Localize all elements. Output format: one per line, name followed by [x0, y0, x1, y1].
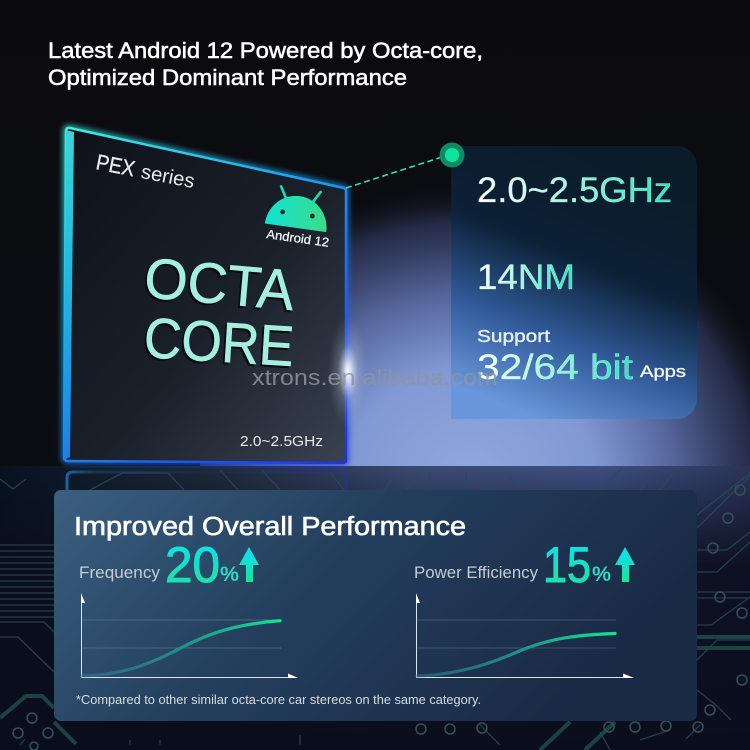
icon: up arrow — [615, 547, 635, 582]
chip edge glow — [64, 128, 346, 463]
chip left edge — [64, 130, 74, 460]
chip panel — [64, 128, 346, 463]
connector dot — [440, 142, 464, 168]
watermark: xtrons.en.alibaba.com — [252, 365, 498, 390]
metric: power efficiency: Power Efficiency — [414, 564, 539, 582]
metric: frequency — [79, 537, 259, 593]
support label: Support — [477, 326, 550, 346]
OCTA CORE heading — [140, 246, 297, 381]
light flare — [328, 316, 368, 428]
circuit board floor — [0, 466, 750, 750]
metric: frequency: Frequency — [79, 564, 161, 582]
OCTA CORE heading: CORE — [140, 308, 294, 381]
PEX series label: series — [139, 161, 196, 193]
apps label: Apps — [640, 362, 686, 381]
spec panel — [451, 146, 697, 419]
footnote: *Compared to other similar octa-core car stereos on the same category. — [76, 693, 481, 707]
metric: power efficiency: % — [592, 563, 611, 586]
title: Optimized Dominant Performance — [48, 65, 407, 90]
process spec: 14NM — [477, 258, 575, 297]
PEX series label: PEX — [94, 149, 137, 181]
metric: power efficiency — [414, 537, 635, 593]
Android 12 label: Android 12 — [266, 227, 330, 250]
metric: frequency: % — [220, 563, 239, 586]
title: Latest Android 12 Powered by Octa-core, — [48, 38, 483, 63]
OCTA CORE heading: OCTA — [142, 246, 297, 323]
metric: power efficiency: 15 — [543, 537, 591, 593]
chart: frequency curve — [81, 593, 298, 678]
OCTA CORE heading: CORE — [142, 306, 296, 379]
chip body — [64, 128, 346, 463]
title — [48, 38, 483, 90]
icon: up arrow — [239, 547, 259, 582]
connector line — [346, 142, 464, 188]
chart: power efficiency curve — [416, 593, 634, 678]
metric: frequency: 20 — [165, 537, 220, 593]
icon: android logo — [265, 185, 332, 232]
frequency label: 2.0~2.5GHz — [240, 433, 323, 450]
PEX series label — [94, 149, 197, 193]
frequency spec: 2.0~2.5GHz — [477, 171, 672, 210]
blue light glow — [200, 150, 750, 466]
chip reflection — [67, 472, 346, 491]
performance panel — [54, 490, 697, 721]
bit spec: 32/64 bit — [477, 348, 633, 387]
panel heading: Improved Overall Performance — [74, 513, 466, 541]
OCTA CORE heading: OCTA — [140, 248, 295, 325]
